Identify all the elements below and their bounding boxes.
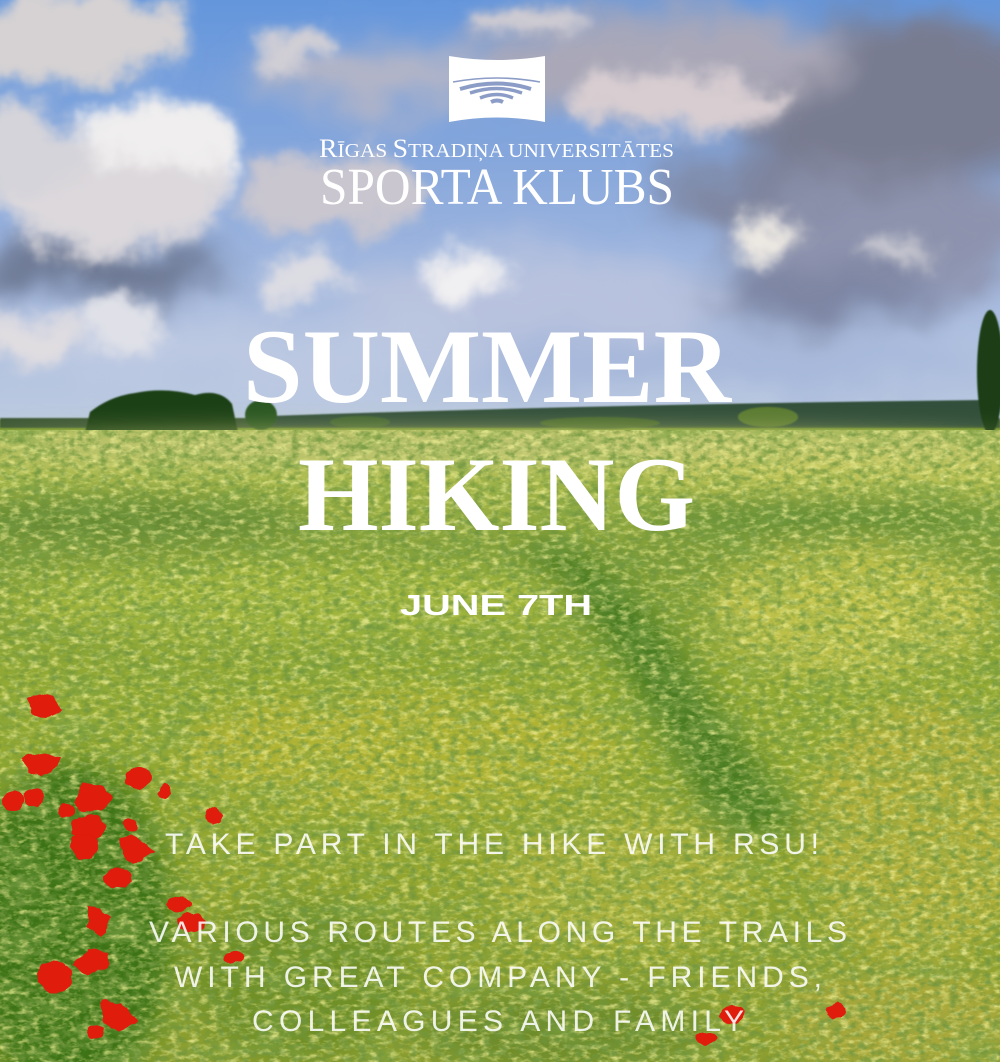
logo text: sports club: SPORTA KLUBS <box>320 159 674 216</box>
icon: university amphitheatre emblem <box>449 56 545 122</box>
line: great company: WITH GREAT COMPANY - FRIENDS, <box>174 961 822 994</box>
poppies <box>2 694 846 1044</box>
logo text: university name: RĪGAS STRADIŅA UNIVERSITĀTES <box>319 134 674 163</box>
logo <box>319 56 674 216</box>
line: colleagues: COLLEAGUES AND FAMILY <box>252 1005 744 1038</box>
title: hiking: HIKING <box>298 436 695 553</box>
wheat field <box>0 430 1000 1062</box>
date: JUNE 7TH <box>400 590 592 622</box>
sky background <box>0 0 1000 420</box>
invitation text <box>149 828 847 1038</box>
line: various routes: VARIOUS ROUTES ALONG THE TRAILS <box>149 916 847 949</box>
tree line on the horizon <box>0 310 1000 434</box>
line: take part: TAKE PART IN THE HIKE WITH RSU! <box>165 828 819 861</box>
clouds <box>0 0 1000 391</box>
title: summer: SUMMER <box>243 308 732 425</box>
